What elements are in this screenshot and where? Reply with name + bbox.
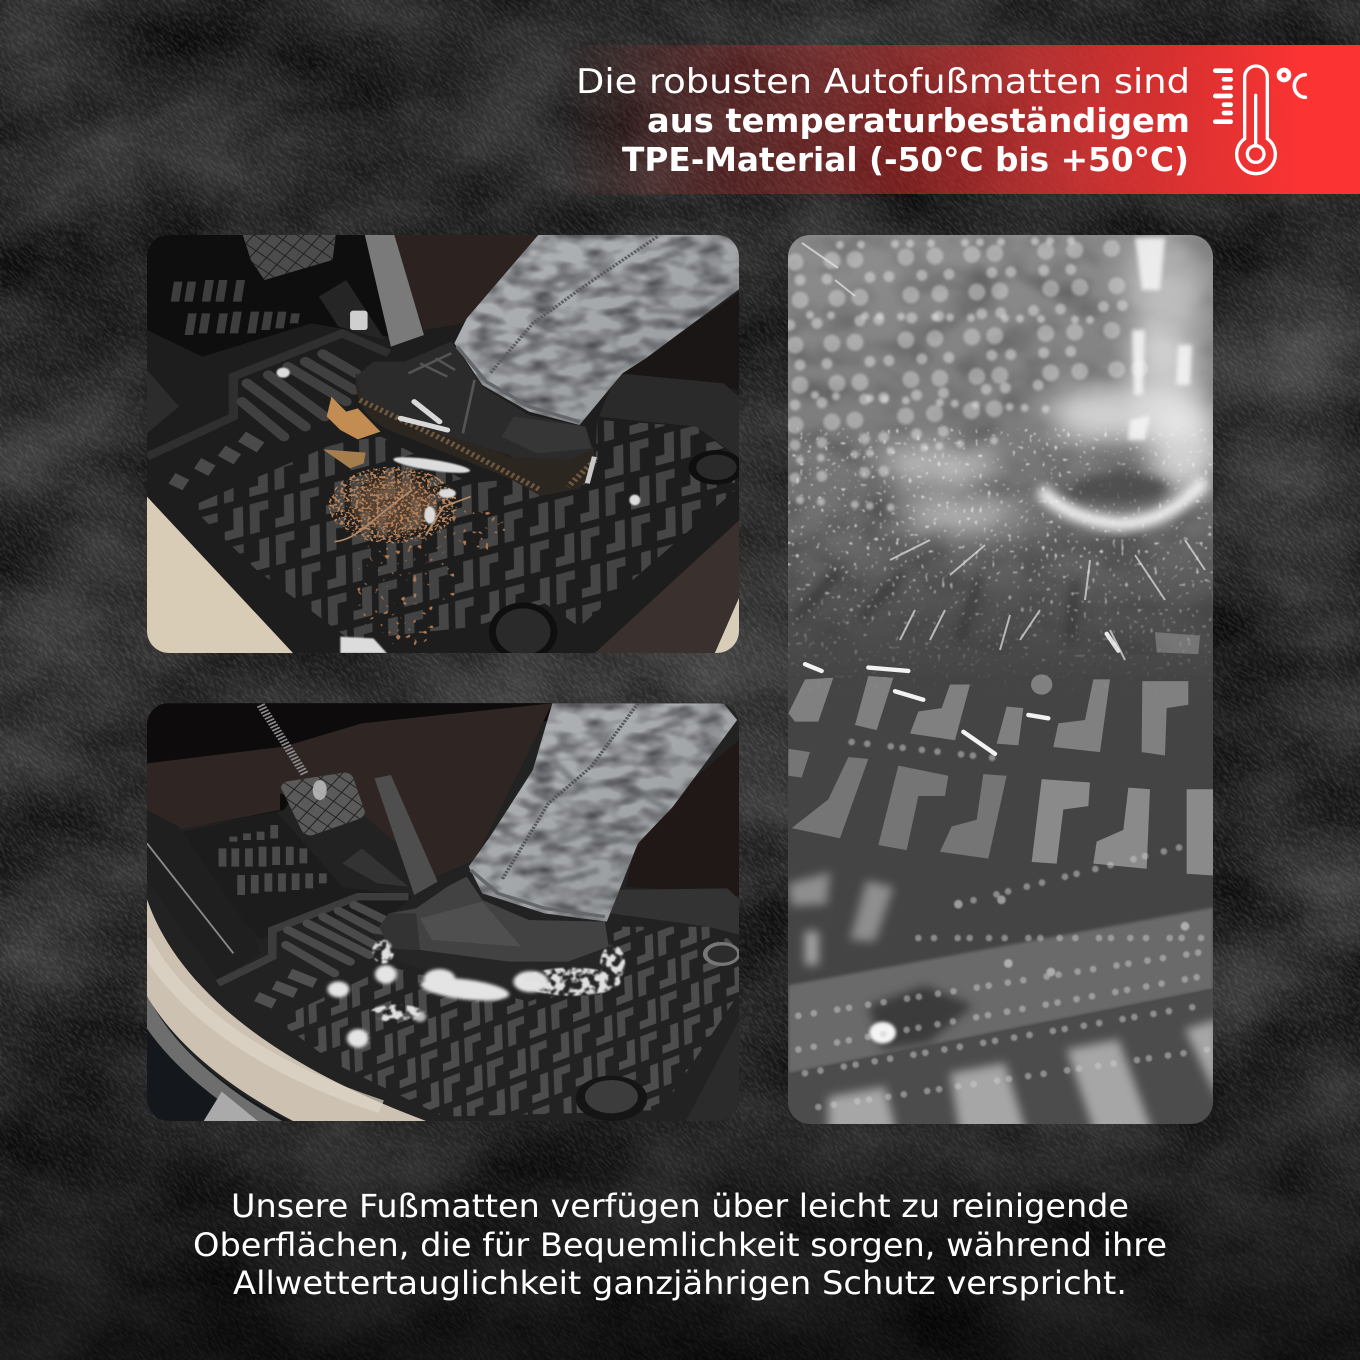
icon: thermometer with degrees Celsius bbox=[1215, 66, 1305, 174]
jeans hem bbox=[457, 347, 580, 422]
lower left dark bbox=[140, 990, 311, 1130]
pedal mount bbox=[319, 280, 385, 340]
photo base bbox=[788, 235, 1213, 1124]
beige door sill bbox=[147, 496, 293, 653]
diamond treads field bbox=[179, 417, 743, 650]
jeans seam bbox=[490, 237, 657, 373]
heading text: aus temperaturbeständigem bbox=[647, 101, 1190, 140]
beige door sill band bbox=[140, 873, 451, 1130]
upper treads bbox=[169, 280, 301, 335]
heel snow bbox=[587, 457, 594, 483]
drain plug bottom bbox=[576, 1076, 647, 1121]
boot laces bbox=[408, 353, 475, 433]
tread field bbox=[257, 920, 751, 1123]
mount dark bbox=[342, 848, 408, 887]
red header band bbox=[560, 45, 1360, 194]
raised rim right bbox=[611, 888, 747, 937]
footer text: Allwettertauglichkeit ganzjährigen Schutz verspricht. bbox=[233, 1264, 1127, 1302]
dark top bbox=[147, 703, 552, 830]
accelerator pedal bbox=[364, 230, 424, 347]
drain plug right bbox=[688, 450, 743, 485]
boot sole bbox=[356, 373, 597, 496]
fine sharp drops bbox=[788, 440, 1213, 690]
white fleck bbox=[350, 311, 368, 330]
splash clouds bbox=[880, 230, 1220, 529]
accelerator pedal bbox=[375, 775, 438, 895]
brake pedal bbox=[241, 230, 336, 280]
round dark pad bbox=[868, 985, 973, 1050]
tread rows seen through water bbox=[795, 570, 1075, 640]
pedal snow bbox=[313, 780, 327, 800]
photo: muddy boot with leaves and debris on floor mat bbox=[140, 230, 750, 661]
jeans shadows bbox=[490, 273, 739, 363]
splash crater bbox=[1072, 473, 1168, 503]
photo: snowy boot on floor mat bbox=[140, 700, 751, 1137]
drain plug bottom bbox=[489, 602, 557, 661]
dark carpet right bbox=[670, 300, 736, 389]
left console bbox=[147, 810, 261, 980]
tread pieces row 3 blurred bbox=[788, 872, 893, 965]
sill highlight bbox=[143, 940, 381, 1107]
footwell mat bbox=[183, 812, 412, 940]
blurred lower bars bbox=[828, 1019, 1218, 1134]
footer text: Unsere Fußmatten verfügen über leicht zu reinigende bbox=[231, 1187, 1129, 1225]
brake pedal bbox=[281, 773, 365, 835]
snow on mat bbox=[277, 368, 640, 653]
jeans shadows bbox=[541, 760, 669, 883]
jeans hem bbox=[471, 870, 605, 917]
boot upper bbox=[379, 877, 609, 962]
photo: water splash on mat tread, grayscale bbox=[785, 230, 1220, 1134]
brown carpet upper bbox=[394, 235, 538, 330]
white water flecks bbox=[805, 634, 1118, 754]
leaf small bbox=[323, 449, 366, 468]
heading text: TPE-Material (-50°C bis +50°C) bbox=[622, 140, 1189, 179]
footer text bbox=[193, 1187, 1167, 1302]
jeans bbox=[469, 703, 737, 922]
water spray layers bbox=[788, 235, 1213, 690]
carpet right bbox=[626, 740, 747, 897]
mat border band bbox=[788, 908, 1213, 1073]
dark water mottling bbox=[788, 235, 1213, 655]
small bars bbox=[257, 973, 315, 1004]
chevron stripes bbox=[286, 905, 385, 973]
boot heel panel bbox=[502, 417, 591, 453]
sill inner grey bbox=[140, 1000, 296, 1137]
boot upper bbox=[356, 342, 593, 460]
mat raised rim right bbox=[600, 374, 739, 458]
small bars bbox=[172, 437, 261, 485]
beige sill lower right bbox=[714, 598, 739, 653]
footwell treads bbox=[222, 825, 323, 895]
droplets on mat bbox=[798, 742, 1208, 1107]
snow around sole bbox=[327, 940, 625, 1048]
bokeh drops bbox=[790, 240, 1150, 510]
jeans seam bbox=[502, 703, 638, 880]
lower dark section bbox=[785, 989, 1213, 1127]
footer text: Oberflächen, die für Bequemlichkeit sorgen, während ihre bbox=[193, 1226, 1167, 1264]
raised mat ridge bbox=[147, 333, 389, 457]
brown carpet bbox=[147, 703, 552, 877]
boot canvas panel bbox=[420, 902, 521, 947]
radial spray streaks bbox=[802, 243, 1205, 660]
splash ring bbox=[1040, 480, 1205, 524]
brown carpet lower right bbox=[595, 520, 739, 653]
pedal arm bbox=[261, 705, 305, 775]
heading text bbox=[576, 62, 1190, 179]
left console bbox=[147, 370, 179, 433]
mat base bbox=[140, 700, 750, 1130]
chevron stripes bbox=[242, 354, 356, 437]
debris soil bbox=[329, 467, 510, 647]
boot toe cap dark bbox=[379, 913, 420, 950]
tread pieces row 2 bbox=[788, 749, 1213, 875]
tread pieces row 1 bbox=[788, 632, 1200, 755]
drain plug right bbox=[703, 942, 740, 966]
boot snow streak bbox=[401, 402, 447, 430]
jeans bbox=[454, 230, 747, 425]
door step bbox=[202, 1092, 261, 1123]
right mat edge bbox=[685, 1020, 747, 1123]
mat base bbox=[147, 289, 739, 653]
heading text: Die robusten Autofußmatten sind bbox=[576, 62, 1190, 102]
footwell dark top bbox=[147, 235, 389, 357]
ridge bbox=[218, 897, 408, 983]
leaf large bbox=[327, 397, 380, 439]
boot sole bbox=[373, 933, 622, 997]
boot mud specks bbox=[360, 400, 595, 490]
water column bbox=[1128, 238, 1192, 440]
white droplet blob bbox=[869, 1022, 896, 1043]
